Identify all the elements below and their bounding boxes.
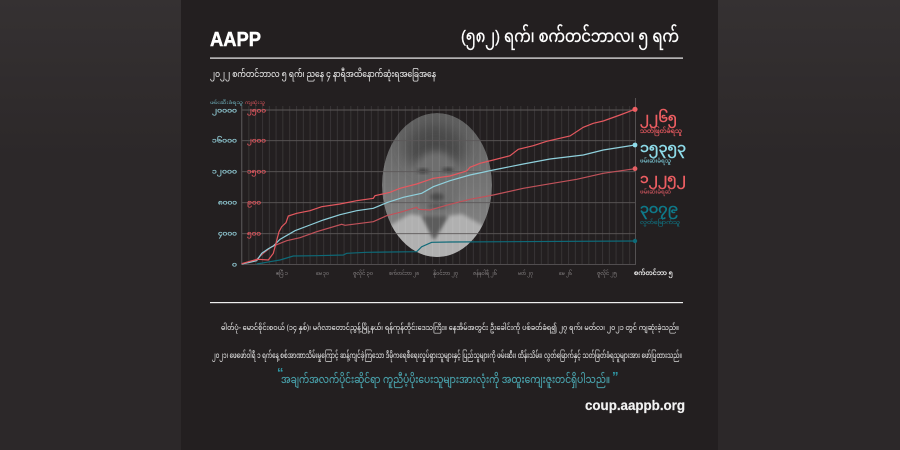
left axis labels: arrests: ၈၀၀၀ (218, 200, 237, 207)
left axis labels: arrests: ၄၀၀၀ (218, 231, 237, 239)
stat: killed: သတ်ဖြတ်ခံရသူ (640, 127, 682, 136)
left axis labels: arrests: ၁၂၀၀၀ (212, 169, 237, 177)
stat: released: လွတ်မြောက်သူ (640, 218, 680, 227)
right axis labels: deaths: ၉၀၀ (247, 200, 261, 208)
highlighted quote (277, 365, 618, 388)
stat: still detained: ဖမ်းဆီးခံရဆဲ (640, 188, 671, 196)
x axis date labels: ဇန်နဝါရီ ၂၆ (473, 269, 497, 278)
stat: still detained (640, 172, 686, 196)
right axis labels: deaths: ၁၅၀၀ (247, 169, 266, 177)
header: title date: (၅၈၂) ရက်၊ စက်တင်ဘာလ၊ ၅ ရက် (461, 25, 679, 50)
series line: released (teal) (257, 239, 637, 264)
stat: still detained: ၁၂၂၅၂ (640, 172, 686, 189)
series line: arrested (light blue) (242, 143, 637, 264)
stat: killed: ၂၂၆၅ (640, 109, 677, 128)
header: AAPP logo: AAPP (210, 29, 261, 51)
stat: arrested: ၁၅၃၅၃ (640, 141, 686, 158)
central dark panel (181, 0, 718, 450)
x axis date labels: မတ် ၂၇ (518, 269, 533, 278)
x axis date labels: စက်တင်ဘာ ၅ (634, 269, 673, 278)
x axis date labels (276, 269, 673, 278)
stat: killed (640, 109, 682, 136)
photo caption: ဓါတ်ပုံ- မောင်စိုင်းစဝယ် (၁၄ နှစ်)၊ မင်္ဂလာတောင်ညွန့်မြို့နယ်၊ ရန်ကုန်တိုင်းဒေသကြီး။ နေအိမ်အတွင်း ဦးခေါင်းကို ပစ်ခတ်ခံရ၍ ၂၇ ရက်၊ မတ်လ၊ ၂၀၂၁ တွင် ကျဆုံးခဲ့သည်။ (221, 322, 679, 334)
x axis date labels: ဧပြီ ၁ (276, 269, 288, 278)
x axis date labels: နိုဝင်ဘာ ၂၇ (433, 269, 458, 278)
line chart (210, 98, 686, 278)
right axis labels: deaths (245, 99, 266, 239)
left axis labels: arrests: ၂၀၀၀၀ (212, 108, 237, 116)
right axis labels: deaths: ၅၀၀ (247, 231, 261, 239)
footer rule (210, 302, 683, 303)
series line: still detained (dark red) (242, 166, 637, 264)
right axis labels: deaths: ကျဆုံးသူ (245, 99, 265, 107)
highlighted quote: အချက်အလက်ပိုင်းဆိုင်ရာ ကူညီပံ့ပိုးပေးသူများအားလုံးကို အထူးကျေးဇူးတင်ရှိပါသည်။ (281, 372, 610, 388)
stat: arrested (640, 141, 686, 166)
right axis labels: deaths: ၂၅၀၀ (247, 108, 266, 116)
left axis labels: arrests: ဖမ်းဆီးခံရသူ (210, 98, 243, 107)
header rule (210, 58, 683, 59)
stat: released (640, 202, 680, 227)
stat: arrested: ဖမ်းဆီးခံရသူ (640, 156, 671, 166)
chart grid (242, 98, 635, 264)
left axis labels: arrests: ၀ (232, 261, 237, 268)
description paragraph: ၂၀၂၁၊ ဖေဖော်ဝါရီ ၁ ရက်နေ့ စစ်အာဏာသိမ်းမှုကြောင့် ဆန့်ကျင်ခဲ့ကြသော ဒီမိုကရေစီရေးလှုပ်ရှားသူများနှင့် ပြည်သူများကို ဖမ်းဆီး၊ ထိန်းသိမ်း၊ လွတ်မြောက်နှင့် သတ်ဖြတ်ခံရသူများအား ဖော်ပြထားသည်။ (212, 348, 682, 363)
highlighted quote: ” (612, 369, 618, 384)
series line: killed (red) (242, 107, 638, 264)
x axis date labels: မေ ၃၀ (316, 271, 329, 278)
portrait photo (382, 113, 492, 257)
x axis date labels: မေ ၂၆ (559, 269, 572, 278)
website url: coup.aappb.org (585, 398, 685, 413)
left axis labels: arrests: ၁၆၀၀၀ (212, 136, 237, 145)
left axis labels: arrests (210, 98, 243, 268)
subtitle: ၂၀၂၂ စက်တင်ဘာလ ၅ ရက်၊ ညနေ ၄ နာရီအထိနောက်ဆုံးရအခြေအနေ (210, 67, 436, 81)
stat: released: ၃၀၇၉ (640, 202, 678, 219)
right axis labels: deaths: ၂၀၀၀ (247, 138, 266, 146)
x axis date labels: ဇူလိုင် ၃၀ (353, 269, 373, 278)
x axis date labels: စက်တင်ဘာ ၂၈ (389, 269, 419, 278)
highlighted quote: “ (277, 365, 284, 380)
x axis date labels: ဇူလိုင် ၂၅ (597, 269, 617, 278)
